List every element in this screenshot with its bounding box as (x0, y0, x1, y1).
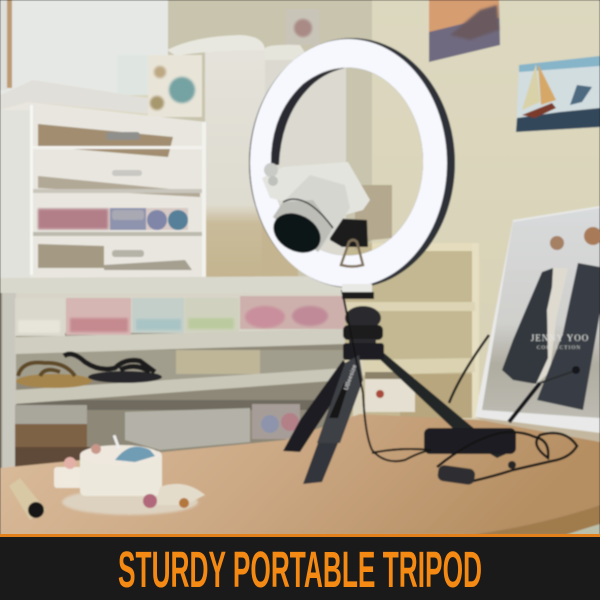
candle display (54, 435, 205, 515)
lens barrel (273, 175, 350, 252)
tray on drawers (0, 80, 148, 114)
poster leaning: JENNY YOO (531, 333, 589, 343)
camera body (262, 162, 370, 215)
tripod head (343, 306, 384, 360)
white hot plate (365, 372, 415, 412)
banner background (0, 537, 600, 600)
wall picture: small flowers (286, 9, 319, 45)
wooden board seen through ring (355, 185, 392, 250)
charging cable and adapter (342, 290, 577, 485)
black power cable on wall (449, 335, 489, 403)
resin cube (117, 55, 202, 117)
handle (317, 355, 363, 443)
orange divider line (0, 534, 600, 537)
poster leaning: COLLECTION (537, 345, 581, 351)
table top (0, 414, 600, 535)
metal ring clip (341, 240, 363, 266)
right leg (372, 352, 506, 458)
dark rear edge of ring (271, 68, 345, 165)
storage boxes row (15, 296, 345, 336)
wood shelf unit on the right (345, 243, 479, 432)
tripod and mount (283, 306, 506, 484)
lens glass (266, 205, 328, 261)
brand label: UBeesize (344, 363, 359, 391)
lens front section (273, 200, 333, 252)
poster leaning (475, 206, 600, 442)
handle slot (329, 383, 349, 418)
ring light mount (342, 284, 374, 299)
ring light (249, 38, 455, 288)
camera mount bracket (330, 218, 368, 247)
lower shelf items (15, 404, 300, 468)
wall picture: sunset (429, 0, 500, 62)
small microphone stand (509, 366, 580, 422)
camera (262, 162, 370, 261)
rolled paper (9, 478, 46, 520)
glass jars (167, 35, 346, 278)
sandals on plates (16, 354, 162, 388)
white shelf unit (0, 276, 372, 473)
wall picture: sailboat (516, 56, 600, 132)
lower handle (303, 443, 338, 484)
rear leg left (283, 360, 352, 452)
bottom banner (0, 534, 600, 600)
acrylic drawer unit (0, 102, 206, 278)
